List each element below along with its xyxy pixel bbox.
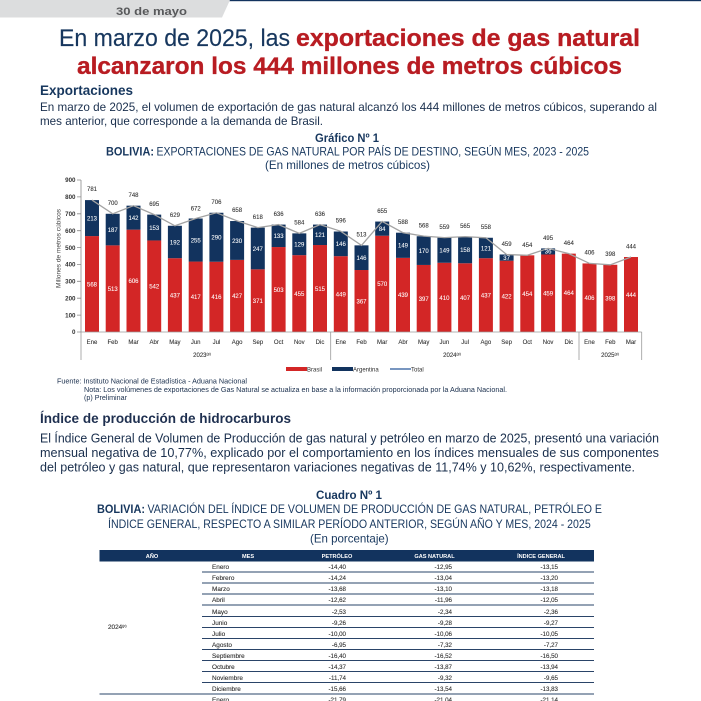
values: totals: 596	[336, 218, 346, 224]
x axis: Jun	[440, 340, 449, 346]
legend: Argentina	[353, 368, 379, 374]
values: totals: 558	[481, 225, 492, 231]
values: Argentina: 121	[315, 233, 326, 239]
table rows: Noviembre	[212, 675, 243, 682]
table rows: -13,20	[540, 575, 559, 582]
year label: 2024	[108, 624, 122, 631]
bars: Argentina	[85, 200, 555, 270]
table rows: -13,54	[434, 686, 453, 693]
table rows: -12,05	[540, 597, 559, 604]
table rows: -6,95	[332, 642, 347, 649]
table heading	[97, 488, 602, 546]
table rows: -7,32	[438, 642, 453, 649]
values: Brasil: 513	[108, 287, 118, 293]
values: totals: 636	[315, 212, 326, 218]
y axis: 700	[65, 211, 76, 218]
title: En marzo de 2025, las	[59, 25, 290, 52]
values: Brasil: 455	[294, 292, 305, 298]
table heading: BOLIVIA:	[97, 502, 145, 516]
table rows: Julio	[212, 631, 226, 638]
table heading: ÍNDICE GENERAL, RESPECTO A SIMILAR PERÍODO ANTERIOR, SEGÚN AÑO Y MES, 2024 - 2025	[108, 516, 591, 531]
table rows: Junio	[212, 620, 228, 627]
x axis: Feb	[605, 340, 616, 346]
x axis: Sep	[252, 340, 264, 346]
values: totals: 655	[377, 209, 388, 215]
x axis: Ene	[335, 340, 347, 346]
values: Brasil: 444	[626, 293, 637, 299]
table heading: Cuadro Nº 1	[316, 488, 382, 502]
x axis: Oct	[523, 340, 532, 346]
text block: exportaciones	[40, 100, 657, 128]
row dividers	[100, 572, 594, 694]
text block: exportaciones: mes anterior, que corresponde a la demanda de Brasil.	[40, 114, 323, 128]
values: totals: 406	[584, 250, 595, 256]
x axis: Jun	[191, 340, 201, 346]
values: Argentina: 213	[87, 216, 98, 222]
values: Brasil: 416	[211, 295, 222, 301]
values: Argentina: 149	[398, 244, 409, 250]
legend	[286, 367, 424, 374]
x axis: Jul	[461, 340, 469, 346]
values: Brasil: 606	[128, 279, 139, 285]
values: totals: 781	[87, 187, 98, 193]
values: totals: 464	[564, 241, 574, 247]
values: totals: 398	[605, 252, 616, 258]
table rows: -16,50	[540, 653, 559, 660]
table rows: Abril	[212, 597, 225, 604]
table rows: -11,74	[329, 675, 347, 682]
table rows: -13,15	[540, 564, 559, 571]
table header: ÍNDICE GENERAL	[517, 552, 566, 560]
source notes: (p) Preliminar	[84, 395, 128, 402]
y axis	[56, 177, 81, 336]
values: Brasil: 371	[253, 299, 263, 305]
date banner: 30 de mayo	[116, 6, 187, 18]
y axis: 600	[65, 228, 76, 235]
values: Brasil: 503	[274, 288, 284, 294]
text block: índice de producción	[40, 430, 659, 474]
table rows: -16,40	[328, 653, 347, 660]
table rows: Enero	[212, 564, 229, 571]
values: Brasil: 542	[149, 284, 160, 290]
heading: exportaciones: Exportaciones	[40, 82, 133, 98]
values: Argentina: 192	[170, 240, 181, 246]
x axis: 2025	[601, 353, 615, 359]
values: totals: 706	[211, 200, 222, 206]
values: Brasil: 454	[522, 292, 533, 298]
table header: AÑO	[146, 553, 159, 560]
table rows: -12,95	[434, 564, 453, 571]
y axis: 200	[65, 295, 76, 302]
title	[59, 25, 640, 80]
x axis: Oct	[274, 340, 284, 346]
x axis: Dic	[316, 340, 324, 346]
title: alcanzaron los 444 millones de metros cúbicos	[77, 53, 622, 80]
values: totals: 565	[460, 224, 471, 230]
values: Brasil: 449	[336, 292, 346, 298]
x axis: Feb	[356, 340, 367, 346]
table rows: -13,18	[540, 586, 559, 593]
chart heading: Gráfico Nº 1	[315, 131, 379, 145]
x axis: Jul	[213, 340, 220, 346]
x axis: Abr	[398, 340, 408, 346]
values: Argentina: 149	[439, 248, 450, 254]
values: Brasil: 464	[564, 291, 574, 297]
table rows: -10,05	[540, 631, 559, 638]
x axis: May	[169, 340, 181, 346]
values: Argentina: 142	[128, 216, 139, 222]
y axis: 100	[65, 312, 76, 319]
values: Argentina: 146	[336, 242, 346, 248]
table rows: -9,26	[332, 620, 347, 627]
table rows: Octubre	[212, 664, 235, 671]
values: Argentina: 158	[460, 248, 471, 254]
values: totals: 588	[398, 220, 409, 226]
x axis	[81, 332, 642, 360]
x axis: 2023	[193, 353, 207, 359]
values: totals: 636	[274, 212, 284, 218]
source notes	[57, 378, 507, 402]
x axis: Ene	[87, 340, 98, 346]
values: Brasil: 410	[439, 296, 450, 302]
table rows: -11,96	[435, 597, 453, 604]
table rows: -13,94	[540, 664, 559, 671]
x axis: (p)	[457, 352, 461, 356]
table rows: -10,06	[434, 631, 453, 638]
table rows: -10,00	[328, 631, 347, 638]
y axis: Millones de metros cúbicos	[56, 209, 62, 288]
values: totals: 695	[149, 202, 160, 208]
legend: Brasil	[307, 368, 322, 374]
values: totals: 700	[108, 201, 118, 207]
table rows: Marzo	[212, 586, 230, 593]
values: Brasil: 437	[170, 293, 181, 299]
values: Argentina: 247	[253, 247, 263, 253]
values: totals: 444	[626, 244, 637, 250]
chart heading: (En millones de metros cúbicos)	[265, 158, 430, 172]
values: Argentina: 129	[294, 243, 305, 249]
table heading: (En porcentaje)	[310, 532, 389, 546]
table rows: Septiembre	[212, 653, 245, 660]
y axis: 0	[72, 329, 76, 336]
x axis: Mar	[128, 340, 139, 346]
values: Argentina: 230	[232, 239, 243, 245]
values: Brasil	[87, 279, 637, 305]
values: Brasil: 459	[543, 292, 554, 298]
values: totals: 559	[439, 225, 450, 231]
table rows: -14,40	[328, 564, 347, 571]
table rows	[212, 564, 559, 701]
table rows: -14,37	[328, 664, 347, 671]
chart heading: EXPORTACIONES DE GAS NATURAL POR PAÍS DE DESTINO, SEGÚN MES, 2023 - 2025	[156, 144, 589, 158]
x axis: Sep	[501, 340, 513, 346]
values: totals: 748	[128, 193, 139, 199]
table rows: -9,28	[438, 620, 453, 627]
values: Brasil: 568	[87, 282, 98, 288]
values: Brasil: 398	[605, 297, 616, 303]
values: totals: 629	[170, 213, 181, 219]
values: Brasil: 427	[232, 294, 243, 300]
table rows: -9,27	[544, 620, 559, 627]
x axis: Ago	[232, 340, 243, 346]
table rows: -13,83	[540, 686, 559, 693]
values: Argentina: 84	[379, 227, 386, 233]
table rows: -13,68	[328, 586, 347, 593]
x axis: Feb	[108, 340, 119, 346]
values: Argentina: 290	[211, 236, 222, 242]
table rows: -9,32	[438, 675, 453, 682]
values: Argentina: 121	[481, 246, 492, 252]
table rows: -2,34	[438, 609, 453, 616]
values: Brasil: 417	[191, 295, 201, 301]
table header: MES	[242, 554, 254, 560]
values: Argentina: 255	[191, 238, 201, 244]
values: Argentina: 37	[503, 256, 511, 262]
table header: PETRÓLEO	[322, 552, 353, 560]
x axis: Dic	[564, 340, 573, 346]
values: Argentina: 153	[149, 226, 160, 232]
values: totals: 618	[253, 215, 263, 221]
text block: índice de producción: mensual negativa de 10,77%, explicado por el comportamiento en los índices mensuales de sus componentes	[40, 446, 659, 460]
x axis: Ene	[584, 340, 595, 346]
table rows: -12,62	[328, 597, 347, 604]
values: totals: 454	[522, 243, 533, 249]
table rows: -16,52	[434, 653, 453, 660]
table rows: Febrero	[212, 575, 235, 582]
x axis: May	[418, 340, 429, 346]
values: totals: 513	[356, 232, 367, 238]
x axis: (p)	[207, 352, 211, 356]
values: Argentina: 133	[274, 234, 284, 240]
text block: exportaciones: En marzo de 2025, el volumen de exportación de gas natural alcanzó los 444 millones de metros cúbicos, superando al	[40, 100, 657, 114]
x axis: Mar	[377, 340, 387, 346]
title: exportaciones de gas natural	[296, 25, 640, 52]
values: totals: 459	[502, 242, 512, 248]
x axis: 2024	[443, 353, 457, 359]
values: Brasil: 367	[356, 299, 367, 305]
values: Argentina: 187	[108, 228, 118, 234]
heading: índice de producción: Índice de producción de hidrocarburos	[40, 410, 291, 426]
values: Brasil: 406	[584, 296, 595, 302]
text block: índice de producción: del petróleo y gas natural, que representaron variaciones negativas de 11,74% y 10,62%, respectivamente.	[40, 460, 635, 474]
year label: (p)	[122, 624, 126, 628]
source notes: Fuente: Instituto Nacional de Estadística - Aduana Nacional	[57, 378, 247, 386]
y axis: 300	[65, 278, 76, 286]
table rows: Diciembre	[212, 686, 241, 693]
x axis: Mar	[626, 340, 636, 346]
x axis: Ago	[481, 340, 492, 346]
date banner	[0, 0, 701, 18]
values: Brasil: 437	[481, 293, 492, 299]
bar chart	[56, 177, 642, 374]
values: Brasil: 407	[460, 296, 471, 302]
values: totals: 495	[543, 236, 554, 242]
y axis: 500	[65, 245, 76, 252]
bars: Brasil	[85, 230, 638, 332]
table rows: -14,24	[328, 575, 347, 582]
y axis: 400	[65, 262, 76, 269]
table header	[100, 550, 594, 562]
chart heading: BOLIVIA:	[106, 144, 154, 158]
values: Brasil: 515	[315, 287, 326, 293]
y axis: 900	[65, 177, 76, 184]
table rows: -13,04	[434, 575, 453, 582]
x axis: (p)	[615, 352, 619, 356]
table rows: -7,27	[544, 642, 559, 649]
table rows: -2,53	[332, 609, 347, 616]
values: Brasil: 397	[419, 297, 429, 303]
legend: Total	[411, 368, 424, 374]
table heading: VARIACIÓN DEL ÍNDICE DE VOLUMEN DE PRODUCCIÓN DE GAS NATURAL, PETRÓLEO E	[148, 501, 602, 516]
source notes: Nota: Los volúmenes de exportaciones de Gas Natural se actualiza en base a la información proporcionada por la Aduana Nacional.	[84, 387, 507, 394]
table rows: -13,10	[434, 586, 453, 593]
table rows: -15,66	[328, 686, 347, 693]
table rows: -9,65	[544, 675, 559, 682]
values: Argentina: 36	[545, 250, 552, 256]
values: Brasil: 439	[398, 293, 409, 299]
x axis: Abr	[150, 340, 159, 346]
y axis: 800	[65, 194, 76, 201]
values: Brasil: 570	[377, 282, 388, 288]
values: Argentina: 170	[419, 249, 429, 255]
values: totals: 658	[232, 208, 243, 214]
values: Brasil: 422	[502, 295, 512, 301]
table rows: Agosto	[212, 642, 232, 649]
data table	[100, 550, 594, 701]
table rows: -13,87	[434, 664, 453, 671]
values: totals: 568	[419, 224, 429, 230]
values: totals: 672	[191, 206, 201, 212]
values: Argentina: 146	[356, 256, 367, 262]
table header: GAS NATURAL	[414, 554, 455, 560]
total line	[92, 200, 631, 265]
text block: índice de producción: El Índice General de Volumen de Producción de gas natural y petróleo en marzo de 2025, presentó una variación	[40, 430, 659, 446]
x axis: Nov	[294, 340, 305, 346]
values: Argentina	[87, 216, 552, 262]
table rows: Mayo	[212, 609, 228, 616]
chart heading	[106, 131, 589, 172]
table rows: -2,36	[544, 609, 559, 616]
values: totals: 584	[294, 220, 305, 226]
x axis: Nov	[543, 340, 553, 346]
values: totals	[87, 187, 637, 258]
